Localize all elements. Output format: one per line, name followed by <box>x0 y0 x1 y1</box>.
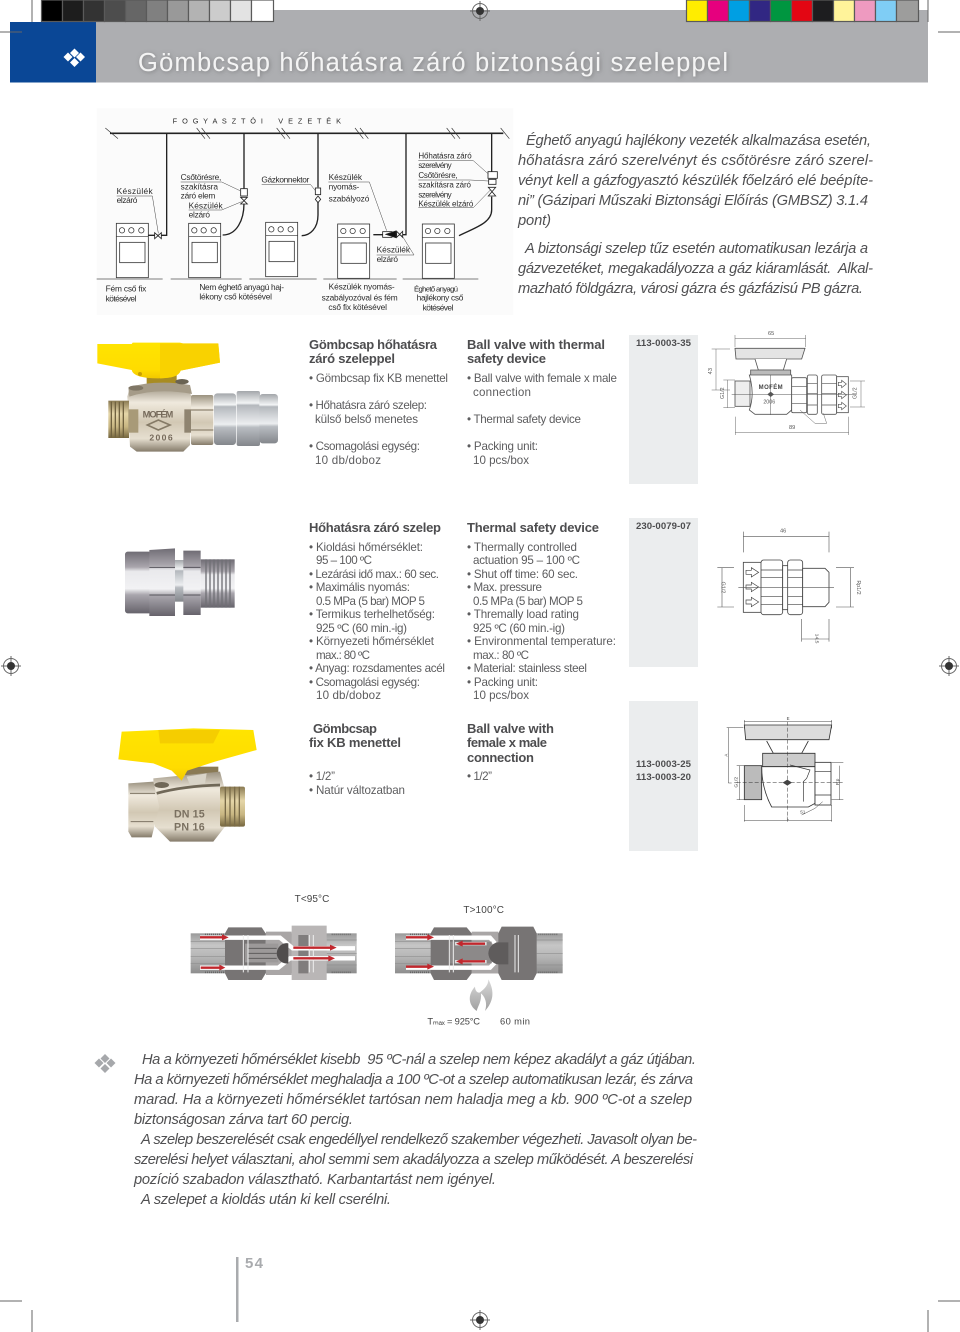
heading: Hungarian product 1 <box>309 337 438 366</box>
heading: English product 1 <box>467 337 605 366</box>
intro text: hőhatásra záró szerelvényt és csőtörésre záró szerel- <box>518 153 873 169</box>
specs: English product 1: 10 pcs/box <box>473 454 529 467</box>
diagram labels: Éghető anyagú <box>414 284 458 293</box>
drawing: ball valve with thermal device: 2006 <box>763 400 775 406</box>
section: T above 100 °C: 60 min <box>500 1017 530 1027</box>
specs: Hungarian product 2: 10 db/doboz <box>316 689 381 702</box>
diagram labels: Készülék <box>189 200 223 210</box>
diagram labels: szerelvény <box>418 161 452 170</box>
specs: Hungarian product 2: max.: 80 ºC <box>316 649 370 662</box>
page number: 54 <box>245 1255 264 1272</box>
heading: English product 3: Ball valve with <box>467 721 554 736</box>
title: Gömbcsap hőhatásra záró biztonsági szeleppel <box>138 49 728 77</box>
specs: Hungarian product 1: 10 db/doboz <box>315 454 381 467</box>
diagram labels: Készülék <box>377 245 411 255</box>
specs: Hungarian product 2: • Környezeti hőmérséklet <box>309 635 435 648</box>
section: T above 100 °C <box>395 905 563 1027</box>
heading: English product 1: Ball valve with thermal <box>467 337 605 352</box>
photo: ball valve with female x male connection <box>118 728 257 842</box>
drawing: ball valve with thermal device: G1/2 <box>720 387 726 399</box>
heading: Hungarian product 1: záró szeleppel <box>309 351 395 366</box>
specs: English product 2: • Environmental temperature: <box>467 635 616 648</box>
photo: ball valve with thermal device: MOFÉM <box>143 409 174 419</box>
valves and fittings <box>155 172 497 239</box>
diagram labels: elzáró <box>189 210 210 220</box>
diagram labels: szakításra <box>181 181 218 191</box>
drawing: thermal safety device: 14,5 <box>813 634 819 644</box>
specs: Hungarian product 2: • Termikus terhelhetőség: <box>309 608 435 621</box>
section: T above 100 °C: Tₘₐₓ = 925°C <box>427 1017 480 1027</box>
specs: Hungarian product 3: • 1/2” <box>309 770 335 783</box>
body text: A szelep beszerelését csak engedéllyel rendelkező szakember végezheti. Javasolt olyan be- <box>140 1132 697 1148</box>
diagram leader lines <box>117 161 491 255</box>
heading: Hungarian product 3 <box>309 721 401 750</box>
section: T below 95 °C <box>191 894 357 980</box>
body text: Ha a környezeti hőmérséklet kisebb 95 ºC-nál a szelep nem képez akadályt a gáz útjában. <box>142 1052 696 1068</box>
intro text: A biztonsági szelep tűz esetén automatikusan lezárja a <box>524 241 868 257</box>
body text: szerelési helyet választani, ahol semmi sem akadályozza a szelep működését. A beszerelési <box>134 1152 694 1168</box>
diagram labels: elzáró <box>117 195 138 205</box>
specs: Hungarian product 1: • Csomagolási egység: <box>309 440 420 453</box>
header band <box>96 10 928 82</box>
photo: ball valve with thermal device: 2006 <box>149 433 173 443</box>
body text: biztonságosan zárva tart 60 percig. <box>134 1112 353 1128</box>
drawing: ball valve with female x male connection: G1/2 <box>733 777 739 788</box>
specs: English product 2: actuation 95 – 100 ºC <box>473 554 580 567</box>
drawing: ball valve with female x male connection <box>723 716 843 822</box>
specs: English product 2: • Thremally load rating <box>467 608 579 621</box>
diagram labels: szerelvény <box>418 190 452 199</box>
diagram labels: cső fix kötésével <box>328 302 387 312</box>
panel: codes 113-0003-25 and 113-0003-20: 113-0003-25 <box>636 759 692 770</box>
specs: Hungarian product 1: • Hőhatásra záró szelep: <box>309 399 427 412</box>
specs: English product 1: connection <box>473 386 531 399</box>
diagram labels: szakításra záró <box>418 180 472 189</box>
specs: Hungarian product 2 <box>309 541 445 702</box>
icon: body text diamonds <box>94 1054 116 1073</box>
specs: English product 1: • Thermal safety device <box>467 413 581 426</box>
diagram labels: hajlékony cső <box>417 292 464 302</box>
diagram labels: Csőtörésre, <box>181 172 221 182</box>
specs: English product 2: 0.5 MPa (5 bar) MOP 5 <box>473 595 583 608</box>
section: T above 100 °C: T>100°C <box>463 905 504 916</box>
stoves <box>116 222 454 278</box>
heading: Hungarian product 3: Gömbcsap <box>313 721 377 736</box>
icon: flame <box>470 979 492 1011</box>
panel: code 230-0079-07: 230-0079-07 <box>636 521 691 532</box>
specs: English product 2: max.: 80 ºC <box>473 649 529 662</box>
body text <box>133 1052 697 1208</box>
specs: Hungarian product 2: • Lezárási idő max.: 60 sec. <box>309 568 439 581</box>
diagram labels: elzáró <box>377 254 398 264</box>
grayscale swatches <box>42 0 274 22</box>
header blue block <box>10 22 96 82</box>
drawing: ball valve with female x male connection: Rp <box>835 778 841 785</box>
heading: Hungarian product 1: Gömbcsap hőhatásra <box>309 337 438 352</box>
page number rule <box>236 1257 238 1322</box>
specs: Hungarian product 1: külső belső menetes <box>315 413 418 426</box>
diagram labels: kötésével <box>106 293 136 303</box>
body text: Ha a környezeti hőmérséklet meghaladja a 100 ºC-ot a szelep automatikusan lezár, és zárva <box>134 1072 693 1088</box>
specs: Hungarian product 1: • Gömbcsap fix KB menettel <box>309 372 448 385</box>
panel: codes 113-0003-25 and 113-0003-20 <box>629 701 698 851</box>
heading: English product 3 <box>467 721 554 765</box>
heading: English product 2: Thermal safety device <box>467 520 599 535</box>
floor lines <box>97 278 478 280</box>
drawing: ball valve with thermal device: MOFÉM <box>759 383 783 391</box>
intro text: gázvezetéket, megakadályozza a gáz kiáramlását. Alkal- <box>518 261 873 277</box>
photo: ball valve with thermal device <box>97 343 278 452</box>
diagram labels: nyomás- <box>329 181 360 191</box>
drawing: ball valve with female x male connection: S1 <box>800 810 806 815</box>
heading: Hungarian product 3: fix KB menettel <box>309 735 401 750</box>
diagram labels: Készülék nyomás- <box>329 281 395 291</box>
section diagrams <box>191 894 563 1027</box>
drawing: ball valve with female x male connection: E <box>787 716 790 721</box>
specs: Hungarian product 2: • Anyag: rozsdamentes acél <box>309 662 445 675</box>
specs: English product 2: • Packing unit: <box>467 676 538 689</box>
specs: English product 2: 10 pcs/box <box>473 689 529 702</box>
specs: English product 3: • 1/2” <box>467 770 492 783</box>
specs: English product 2: • Max. pressure <box>467 581 542 594</box>
intro text: Éghető anyagú hajlékony vezeték alkalmazása esetén, <box>526 132 871 149</box>
diagram labels: szabályozóval és fém <box>322 292 398 302</box>
panel: code 113-0003-35 <box>629 335 698 484</box>
photo: thermal safety device <box>125 548 235 616</box>
diagram labels: záró elem <box>181 191 215 201</box>
main gas pipe <box>110 131 503 136</box>
diagram labels: Készülék elzáró <box>418 200 474 209</box>
specs: Hungarian product 1 <box>309 372 448 467</box>
body text: A szelepet a kioldás után ki kell cserélni. <box>140 1192 391 1208</box>
installation diagram <box>97 108 513 315</box>
specs: Hungarian product 2: • Maximális nyomás: <box>309 581 410 594</box>
body text: marad. Ha a környezeti hőmérséklet tartósan nem haladja meg a kb. 900 ºC-ot a szelep <box>134 1092 692 1108</box>
drawing: ball valve with thermal device: G1/2 <box>853 387 859 399</box>
specs: English product 1 <box>467 372 617 467</box>
diagram heading: F O G Y A S Z T Ó I V E Z E T É K <box>173 116 341 125</box>
intro text: vényt kell a gázfogyasztó készülék főelzáró elé beépíte- <box>518 173 873 189</box>
pipe break marks <box>105 128 509 139</box>
diagram labels: lékony cső kötésével <box>199 291 272 301</box>
section: T below 95 °C: T<95°C <box>295 894 329 905</box>
specs: English product 2 <box>467 541 616 702</box>
diagram labels: Gázkonnektor <box>261 175 310 185</box>
diagram labels <box>106 152 474 312</box>
heading: English product 1: safety device <box>467 351 546 366</box>
drawing: ball valve with thermal device: 89 <box>789 425 795 431</box>
drawing: ball valve with thermal device <box>708 331 865 435</box>
specs: English product 2: • Shut off time: 60 sec. <box>467 568 578 581</box>
heading: English product 3: female x male <box>467 735 547 750</box>
drawing: thermal safety device: 46 <box>780 528 786 534</box>
photo: ball valve with female x male connection: PN 16 <box>174 822 205 834</box>
intro text <box>517 132 873 297</box>
panel: codes 113-0003-25 and 113-0003-20: 113-0003-20 <box>636 772 691 783</box>
diagram labels: Nem éghető anyagú haj- <box>199 282 284 292</box>
diagram labels: Fém cső fix <box>106 284 147 294</box>
drawing: ball valve with female x male connection: L <box>787 815 790 820</box>
specs: English product 1: • Ball valve with female x male <box>467 372 617 385</box>
diagram labels: szabályozó <box>329 193 370 203</box>
specs: Hungarian product 2: 0.5 MPa (5 bar) MOP 5 <box>316 595 425 608</box>
drawing: ball valve with female x male connection: A <box>723 754 728 757</box>
specs: English product 1: • Packing unit: <box>467 440 538 453</box>
specs: Hungarian product 3: • Natúr változatban <box>309 784 405 797</box>
diagram labels: Készülék <box>117 186 153 196</box>
specs: English product 2: • Thermally controlled <box>467 541 577 554</box>
specs: Hungarian product 2: • Kioldási hőmérséklet: <box>309 541 423 554</box>
icon: header diamonds <box>64 48 85 67</box>
specs: English product 2: 925 ºC (60 min.-ig) <box>473 622 565 635</box>
drawing: thermal safety device: Rp1/2 <box>855 580 861 595</box>
photo: ball valve with female x male connection: DN 15 <box>174 808 205 820</box>
specs: Hungarian product 2: 925 ºC (60 min.-ig) <box>316 622 407 635</box>
drawing: ball valve with thermal device: 65 <box>768 331 774 337</box>
drawing: thermal safety device <box>717 528 861 644</box>
diagram labels: Készülék <box>329 172 363 182</box>
colour swatches <box>686 0 918 22</box>
drawing: ball valve with thermal device: 43 <box>708 368 714 374</box>
specs: Hungarian product 2: 95 – 100 ºC <box>316 554 372 567</box>
drawing: thermal safety device: G1/2 <box>720 582 726 593</box>
heading: English product 3: connection <box>467 750 534 765</box>
intro text: mazható földgázra, városi gázra és gázfázisú PB gázra. <box>518 281 863 297</box>
specs: Hungarian product 2: • Csomagolási egység: <box>309 676 420 689</box>
panel: code 230-0079-07 <box>629 518 698 667</box>
intro text: pont) <box>517 213 551 229</box>
body text: pozíció szabadon választható. Karbantartást nem igényel. <box>133 1172 496 1188</box>
diagram labels: kötésével <box>423 302 453 312</box>
diagram labels: Hőhatásra záró <box>418 152 472 161</box>
intro text: ni” (Gázipari Műszaki Biztonsági Előírás (GMBSZ) 3.1.4 <box>518 193 868 209</box>
diagram labels: Csőtörésre, <box>418 171 458 180</box>
specs: English product 2: • Material: stainless steel <box>467 662 587 675</box>
specs: Hungarian product 3 <box>309 770 405 797</box>
heading: Hungarian product 2: Hőhatásra záró szelep <box>309 520 441 535</box>
branch pipes <box>148 133 492 236</box>
panel: code 113-0003-35: 113-0003-35 <box>636 338 692 349</box>
